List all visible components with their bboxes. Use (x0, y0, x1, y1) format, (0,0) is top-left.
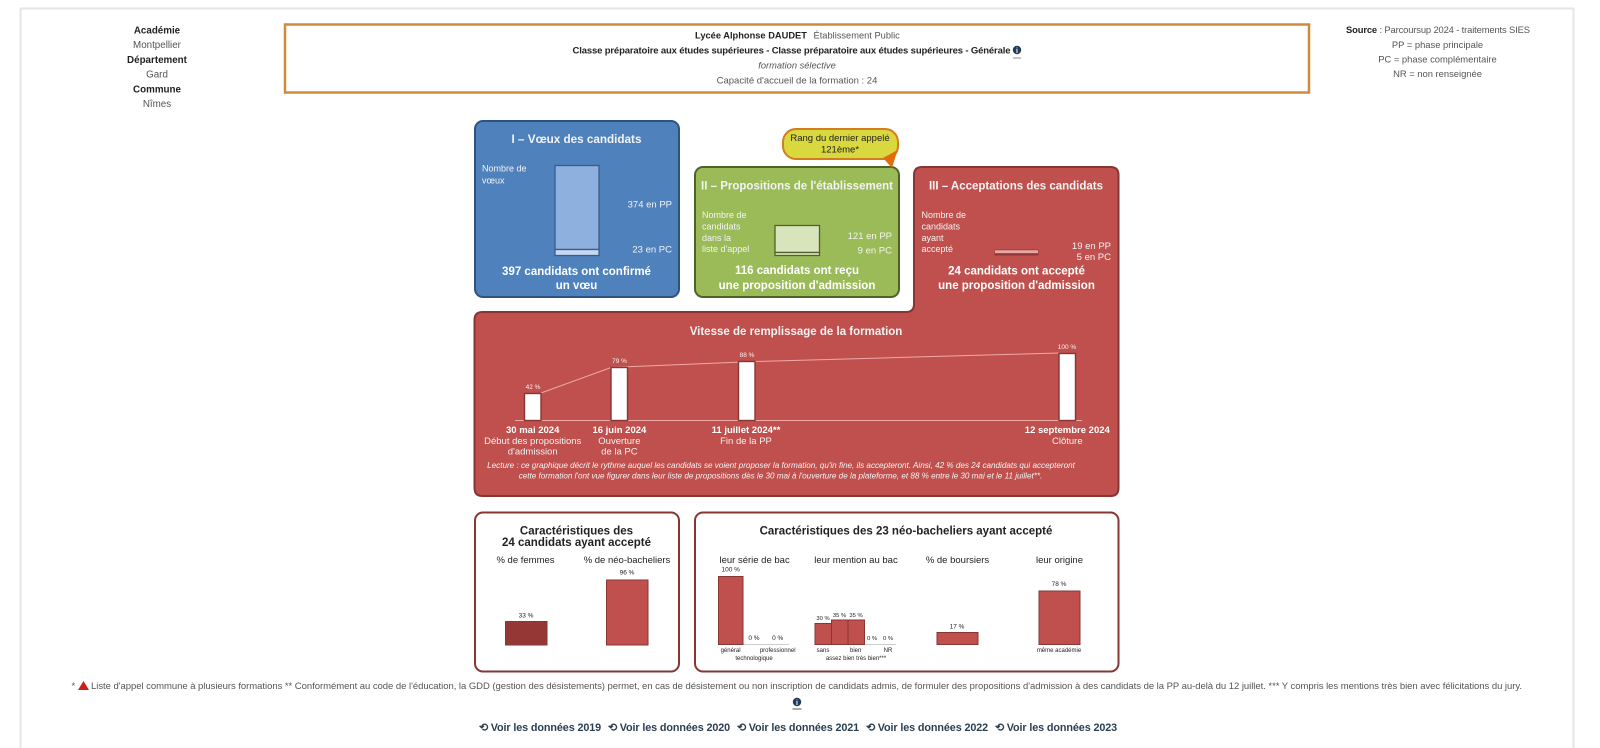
source and legend: NR = non renseignée (1393, 68, 1482, 79)
links: previous years: Voir les données 2022 (878, 722, 988, 734)
bar: boursiers (937, 624, 978, 644)
chart: série de bac: 0 % (772, 635, 784, 642)
header box: establishment: Établissement Public (814, 30, 900, 40)
bar: propositions (775, 226, 820, 256)
panel III: acceptations: III – Acceptations des candidats (929, 180, 1103, 192)
panel II: propositions: 116 candidats ont reçu (735, 265, 859, 277)
links: previous years: Voir les données 2023 (1007, 722, 1117, 734)
chart: filling speed: 79 % (612, 358, 627, 365)
chart: série de bac: 0 % (748, 635, 760, 642)
icon: info (792, 698, 802, 709)
links: previous years: ⟲ (866, 722, 875, 734)
timeline labels: 16 juin 2024 (592, 425, 647, 436)
source and legend (1346, 24, 1530, 79)
source and legend: PP = phase principale (1392, 39, 1483, 50)
chart: série de bac: technologique (735, 656, 773, 662)
panel: caractéristiques des 24 candidats: Caractéristiques des (520, 526, 633, 538)
chart: filling speed: 100 % (1058, 344, 1076, 351)
source and legend: PC = phase complémentaire (1378, 54, 1497, 64)
panel: caractéristiques des 24 candidats: 24 candidats ayant accepté (502, 537, 651, 549)
footnote: * (72, 681, 76, 692)
bar: néo-bacheliers (606, 570, 648, 645)
links: previous years (479, 722, 1117, 734)
header box: establishment: formation sélective (758, 60, 836, 70)
panel: caractéristiques des 23 néo-bacheliers (695, 512, 1118, 672)
panel II: propositions: 9 en PC (858, 246, 892, 256)
timeline labels: 11 juillet 2024** (712, 425, 781, 436)
chart: série de bac (718, 566, 796, 662)
panel II: propositions (695, 167, 899, 297)
location block: Montpellier (133, 40, 182, 51)
callout: rang du dernier appelé: 121ème* (821, 144, 859, 156)
chart: mention au bac: 0 % (883, 636, 893, 642)
chart: mention au bac: sans (817, 648, 829, 654)
header box: establishment: Classe préparatoire aux études supérieures - Classe préparatoire aux études supérieures - Générale (572, 46, 1010, 56)
chart: mention au bac: 30 % (816, 616, 830, 622)
panel III: acceptations: ayant (922, 233, 944, 243)
chart: série de bac: général (721, 648, 741, 654)
location block: Commune (133, 84, 181, 96)
callout: rang du dernier appelé (783, 129, 898, 168)
header box: establishment: Capacité d'accueil de la formation : 24 (717, 76, 877, 86)
location block (127, 26, 188, 110)
links: previous years: ⟲ (737, 722, 746, 734)
timeline labels: 30 mai 2024 (506, 425, 560, 436)
panel I: voeux des candidats: vœux (482, 176, 505, 186)
panel: caractéristiques des 24 candidats: % de femmes (496, 555, 555, 566)
chart: série de bac: 100 % (721, 566, 740, 574)
links: previous years: Voir les données 2020 (620, 722, 730, 734)
panel: caractéristiques des 23 néo-bacheliers: leur mention au bac (814, 555, 898, 566)
panel I: voeux des candidats: 374 en PP (628, 200, 672, 210)
panel: caractéristiques des 23 néo-bacheliers: leur série de bac (719, 555, 790, 566)
panel II: propositions: candidats (702, 222, 741, 232)
callout: rang du dernier appelé: Rang du dernier appelé (790, 133, 890, 144)
timeline labels: d'admission (508, 446, 558, 458)
location block: Gard (146, 70, 168, 80)
panel II: propositions: Nombre de (702, 210, 747, 220)
panel: caractéristiques des 23 néo-bacheliers: leur origine (1036, 555, 1083, 566)
header box: establishment: Lycée Alphonse DAUDET (695, 30, 807, 40)
chart: mention au bac: 0 % (867, 636, 877, 642)
chart: mention au bac: NR (884, 648, 893, 654)
panel II: propositions: 121 en PP (848, 231, 892, 242)
timeline labels: Fin de la PP (720, 436, 772, 447)
panel I: voeux des candidats: 397 candidats ont confirmé (502, 266, 651, 278)
timeline labels: Clôture (1052, 436, 1083, 447)
header box: establishment: i (1016, 48, 1018, 55)
panel II: propositions: dans la (702, 233, 731, 243)
panel III: acceptations (922, 180, 1111, 292)
bar: femmes (506, 612, 547, 645)
panel I: voeux des candidats: 23 en PC (632, 244, 672, 256)
chart: filling speed: 42 % (526, 384, 541, 391)
chart: mention au bac: 35 % (849, 613, 863, 619)
timeline labels: Ouverture (598, 436, 641, 447)
chart: filling speed: 88 % (740, 352, 755, 359)
reading note: cette formation l'ont vue figurer dans leur liste de propositions dès le 30 mai à l'ouverture de la plateforme, et 88 % entre le 30 mai et le 11 juillet**. (519, 472, 1042, 480)
timeline labels (484, 425, 1111, 458)
chart: série de bac: professionnel (760, 648, 796, 654)
timeline labels: 12 septembre 2024 (1025, 425, 1111, 436)
reading note (487, 461, 1076, 480)
links: previous years: ⟲ (479, 722, 488, 734)
chart: mention au bac: assez bien très bien*** (826, 656, 887, 662)
panel: caractéristiques des 24 candidats (475, 512, 679, 672)
panel II: propositions: liste d'appel (702, 244, 749, 254)
chart: mention au bac (815, 613, 896, 662)
timeline labels: Début des propositions (484, 436, 582, 447)
chart: mention au bac: bien (850, 648, 861, 654)
links: previous years: ⟲ (995, 722, 1004, 734)
panel III: acceptations: candidats (922, 222, 961, 232)
links: previous years: ⟲ (608, 722, 617, 734)
panel I: voeux des candidats (475, 121, 679, 297)
bar: origine (1037, 581, 1082, 654)
bar: origine: même académie (1037, 648, 1082, 654)
bar: boursiers: 17 % (950, 624, 965, 630)
panel I: voeux des candidats: un vœu (556, 280, 597, 292)
panel III and filling speed (474, 167, 1118, 496)
heading: vitesse de remplissage: Vitesse de remplissage de la formation (690, 326, 902, 338)
bar: néo-bacheliers: 96 % (620, 570, 635, 576)
footnote: Liste d'appel commune à plusieurs formations ** Conformément au code de l'éducation, la GDD (gestion des désistements) permet, en cas de désistement ou non inscription de candidats admis, de formuler des propositions d'admission à des candidats de la PP au-delà du 12 juillet. *** Y compris les mentions très bien avec félicitations du jury. (91, 681, 1522, 692)
source and legend: Source : Parcoursup 2024 - traitements SIES (1346, 24, 1530, 35)
panel I: voeux des candidats: I – Vœux des candidats (512, 133, 642, 146)
panel II: propositions: une proposition d'admission (719, 280, 875, 292)
bar: femmes: 33 % (519, 612, 534, 620)
chart: filling speed (515, 344, 1082, 420)
location block: Nîmes (143, 99, 171, 110)
panel III: acceptations: accepté (922, 244, 953, 254)
header box: establishment (285, 24, 1309, 92)
panel: caractéristiques des 23 néo-bacheliers: % de boursiers (926, 555, 989, 566)
panel: caractéristiques des 24 candidats: % de néo-bacheliers (584, 555, 671, 566)
panel I: voeux des candidats: Nombre de (482, 164, 527, 174)
panel II: propositions: II – Propositions de l'établissement (701, 180, 893, 192)
panel III: acceptations: 5 en PC (1077, 252, 1111, 263)
panel III: acceptations: une proposition d'admission (938, 280, 1095, 292)
reading note: Lecture : ce graphique décrit le rythme auquel les candidats se voient proposer la formation, qu'in fine, ils accepteront. Ainsi, 42 % des 24 candidats qui accepteront (487, 461, 1076, 470)
panel III: acceptations: Nombre de (922, 210, 966, 220)
panel III: acceptations: 24 candidats ont accepté (948, 266, 1085, 278)
links: previous years: Voir les données 2019 (491, 722, 601, 734)
links: previous years: Voir les données 2021 (749, 722, 859, 734)
panel III: acceptations: 19 en PP (1072, 241, 1111, 252)
location block: Département (127, 55, 188, 66)
timeline labels: de la PC (601, 446, 638, 458)
location block: Académie (134, 26, 181, 36)
chart: mention au bac: 35 % (833, 613, 846, 619)
bar: origine: 78 % (1052, 581, 1067, 588)
bar: voeux (555, 166, 599, 256)
panel: caractéristiques des 23 néo-bacheliers: Caractéristiques des 23 néo-bacheliers ayant accepté (760, 526, 1052, 538)
icon: info: i (796, 700, 798, 707)
